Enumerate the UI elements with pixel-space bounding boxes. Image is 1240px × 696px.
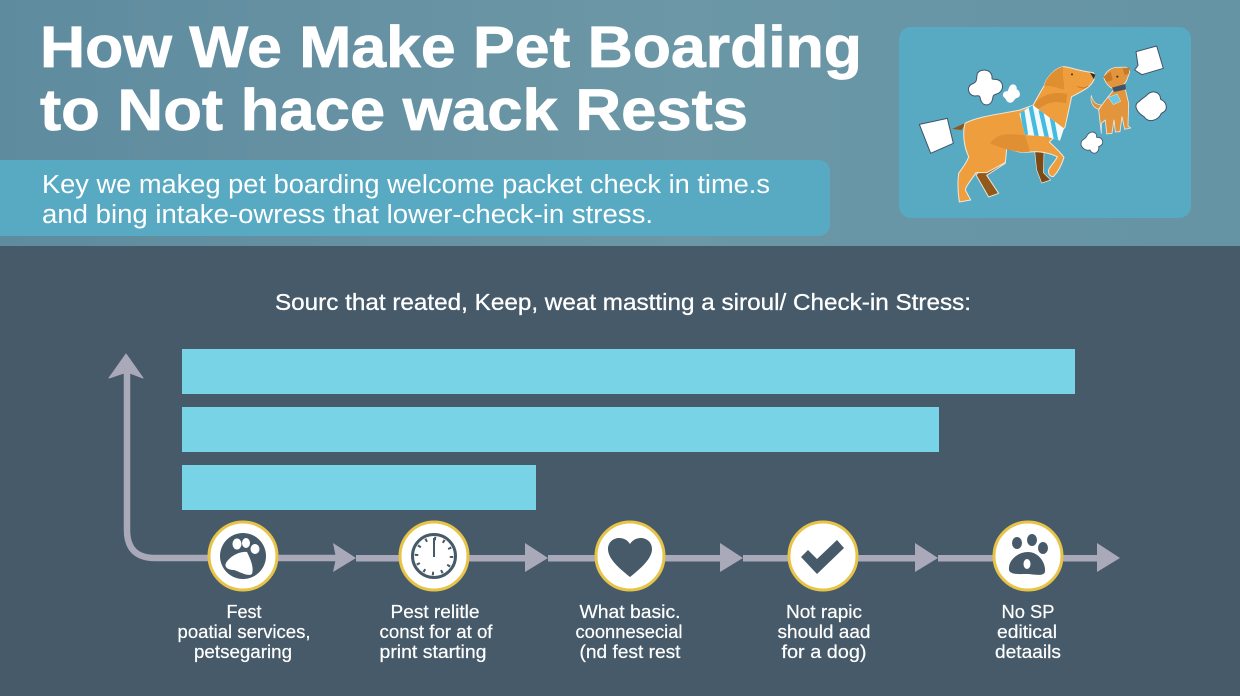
chart heading: Sourc that reated, Keep, weat mastting a siroul/ Check-in Stress: [275, 289, 971, 315]
label: step 1: petsegaring [194, 642, 292, 662]
arrow: axis [109, 354, 340, 558]
icon: cloud bottom [1081, 132, 1103, 153]
bandana [1020, 105, 1064, 140]
subtitle text: and bing intake-owress that lower-check-in stress. [42, 201, 653, 229]
label: step 5 [995, 602, 1061, 662]
icon: heart [596, 522, 664, 590]
icon: cloud left small [1003, 84, 1020, 103]
icon: check mark [789, 522, 857, 590]
title: to Not hace wack Rests [40, 78, 748, 143]
label: step 2: Pest relitle [390, 602, 480, 622]
icon: speech bubble right [1135, 46, 1163, 75]
subtitle text [42, 171, 770, 229]
label: step 1 [178, 602, 310, 662]
subtitle text: Key we makeg pet boarding welcome packet check in time.s [42, 171, 770, 199]
label: step 2: print starting [380, 642, 486, 662]
label: step 4: for a dog) [782, 642, 866, 662]
icon: paw [994, 522, 1062, 590]
panel: main dark background [0, 246, 1240, 696]
label: step 4: should aad [778, 622, 870, 642]
panel: subtitle callout [0, 160, 830, 236]
arrow: flow 5 [938, 543, 1120, 572]
panel: dog illustration [899, 27, 1191, 218]
icon: cloud left large [968, 70, 1003, 105]
big dog [952, 67, 1095, 202]
arrow: flow 1 [333, 543, 356, 572]
panel: header band [0, 0, 1240, 246]
label: step 3: (nd fest rest [580, 642, 680, 662]
label: step 2: const for at of [380, 622, 494, 642]
icon: paw in dark disc [209, 522, 277, 590]
label: step 3 [576, 602, 682, 662]
icon: cloud right [1136, 92, 1166, 121]
title [40, 15, 862, 143]
icon: speech bubble left [919, 118, 953, 153]
arrow: flow 3 [548, 543, 743, 572]
label: step 5: detaails [995, 642, 1061, 662]
label: step 3: What basic. [580, 602, 680, 622]
label: step 1: poatial services, [178, 622, 310, 642]
label: step 1: Fest [226, 602, 262, 622]
bar chart [182, 349, 1075, 510]
label: step 5: No SP [1002, 602, 1054, 622]
title: How We Make Pet Boarding [40, 15, 862, 80]
label: step 4 [778, 602, 870, 662]
icon: clock [400, 522, 468, 590]
label: step 4: Not rapic [786, 602, 862, 622]
small dog [1091, 67, 1131, 134]
label: step 2 [380, 602, 494, 662]
arrow: flow 2 [356, 543, 548, 572]
arrow: flow 4 [743, 543, 938, 572]
label: step 3: coonnesecial [576, 622, 682, 642]
label: step 5: editical [997, 622, 1057, 642]
